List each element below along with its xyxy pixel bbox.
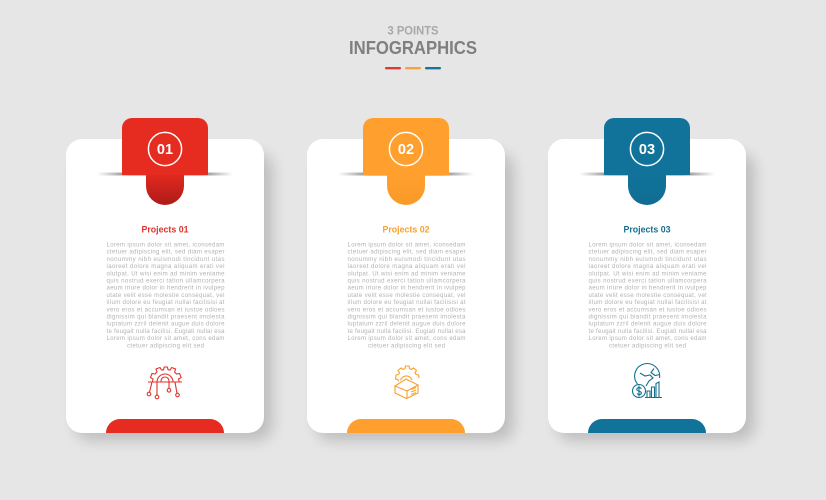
body text: olutpat. Ut wisi enim ad minim veniame — [106, 270, 225, 277]
body text — [106, 242, 225, 349]
body text: aeum iriure dolor in hendrerit in ivulpep — [588, 285, 707, 292]
body text: dignissim qui blandit praesent imolesta — [348, 314, 466, 320]
bottom tab — [106, 419, 224, 433]
panel: card 1 — [66, 118, 273, 441]
body text: Lorem ipsum dolor sit amet, cons edam — [106, 335, 224, 342]
body text: nonummy nibh euismodi tincidunt utas — [106, 256, 224, 263]
body text: aeum iriure dolor in hendrerit in ivulpep — [348, 285, 466, 292]
icon: gear circuit — [147, 367, 182, 399]
number badge — [148, 132, 182, 166]
body text: te feugait nulla facilisi. Eugiati nullai esa — [588, 328, 707, 335]
tab tongue — [387, 175, 425, 205]
card body — [307, 139, 505, 433]
panel: card 3 — [548, 118, 755, 441]
body text: Lorem ipsum dolor sit amet, iconsedam — [106, 242, 224, 248]
icon: gear and box — [395, 366, 419, 398]
subtitle: 3 POINTS — [388, 26, 439, 38]
icon: globe, coin and bars — [632, 364, 662, 398]
panel: card 2 — [307, 118, 514, 441]
body text: utate velit esse molestie consequat, vel — [106, 292, 224, 299]
body text: luptatum zzril delenit augue duis dolore — [106, 321, 225, 328]
body text: ctetuer adipiscing elit sed — [127, 342, 204, 349]
body text: olutpat. Ut wisi enim ad minim veniame — [348, 270, 466, 277]
body text: laoreet dolore magna aliquam erati vel — [588, 263, 706, 270]
body text: dignissim qui blandit praesent imolesta — [588, 314, 707, 320]
slot shadow — [338, 172, 474, 176]
body text: Lorem ipsum dolor sit amet, cons edam — [348, 335, 466, 342]
body text: ctetuer adipiscing elit, sed diam esaper — [588, 249, 706, 256]
slot shadow — [579, 172, 715, 176]
bottom tab — [588, 419, 706, 433]
body text — [588, 242, 707, 349]
body text: quis nostrud exerci tation ullamcorpera — [106, 278, 225, 284]
body text: ctetuer adipiscing elit, sed diam esaper — [348, 249, 466, 256]
body text: ctetuer adipiscing elit sed — [609, 342, 686, 349]
card heading: Projects 03 — [624, 224, 670, 234]
number badge: 02 — [398, 142, 414, 158]
slot shadow — [97, 172, 233, 176]
body text: utate velit esse molestie consequat, vel — [588, 292, 706, 299]
tab top — [122, 118, 208, 175]
tab top — [604, 118, 690, 175]
title dashes — [385, 67, 441, 69]
body text: illum dolore eu feugiat nullai facilisisi at — [106, 299, 225, 306]
body text: nonummy nibh euismodi tincidunt utas — [348, 256, 466, 263]
card shadow — [557, 153, 755, 441]
body text: vero eros et accumsan et iustoe odioes — [106, 306, 224, 313]
body text: laoreet dolore magna aliquam erati vel — [106, 263, 224, 270]
body text: ctetuer adipiscing elit, sed diam esaper — [106, 249, 224, 256]
body text: Lorem ipsum dolor sit amet, iconsedam — [348, 242, 466, 248]
body text: te feugait nulla facilisi. Eugiati nullai esa — [106, 328, 225, 335]
card shadow — [75, 153, 273, 441]
body text: vero eros et accumsan et iustoe odioes — [348, 306, 466, 313]
body text: Lorem ipsum dolor sit amet, iconsedam — [588, 242, 706, 248]
body text: aeum iriure dolor in hendrerit in ivulpep — [106, 285, 225, 292]
body text: te feugait nulla facilisi. Eugiati nullai esa — [348, 328, 466, 335]
card heading: Projects 01 — [142, 224, 188, 234]
body text: luptatum zzril delenit augue duis dolore — [348, 321, 466, 328]
body text: luptatum zzril delenit augue duis dolore — [588, 321, 707, 328]
card body — [548, 139, 746, 433]
number badge: 01 — [157, 142, 173, 158]
tab tongue — [146, 175, 184, 205]
body text: quis nostrud exerci tation ullamcorpera — [588, 278, 707, 284]
card body — [66, 139, 264, 433]
number badge — [389, 132, 423, 166]
heading: INFOGRAPHICS — [349, 38, 477, 58]
body text: illum dolore eu feugiat nullai facilisisi at — [588, 299, 707, 306]
title block — [349, 26, 477, 69]
bottom tab — [347, 419, 465, 433]
card shadow — [316, 153, 514, 441]
body text: quis nostrud exerci tation ullamcorpera — [348, 278, 466, 284]
body text: utate velit esse molestie consequat, vel — [348, 292, 466, 299]
tab top — [363, 118, 449, 175]
tab tongue — [628, 175, 666, 205]
card heading: Projects 02 — [382, 224, 430, 234]
number badge — [630, 132, 664, 166]
body text: laoreet dolore magna aliquam erati vel — [348, 263, 466, 270]
body text: ctetuer adipiscing elit sed — [368, 342, 445, 349]
body text: dignissim qui blandit praesent imolesta — [106, 314, 225, 320]
body text — [348, 242, 466, 349]
body text: Lorem ipsum dolor sit amet, cons edam — [588, 335, 706, 342]
body text: illum dolore eu feugiat nullai facilisisi at — [348, 299, 466, 306]
body text: nonummy nibh euismodi tincidunt utas — [588, 256, 706, 263]
body text: olutpat. Ut wisi enim ad minim veniame — [588, 270, 707, 277]
number badge: 03 — [639, 142, 655, 158]
body text: vero eros et accumsan et iustoe odioes — [588, 306, 706, 313]
